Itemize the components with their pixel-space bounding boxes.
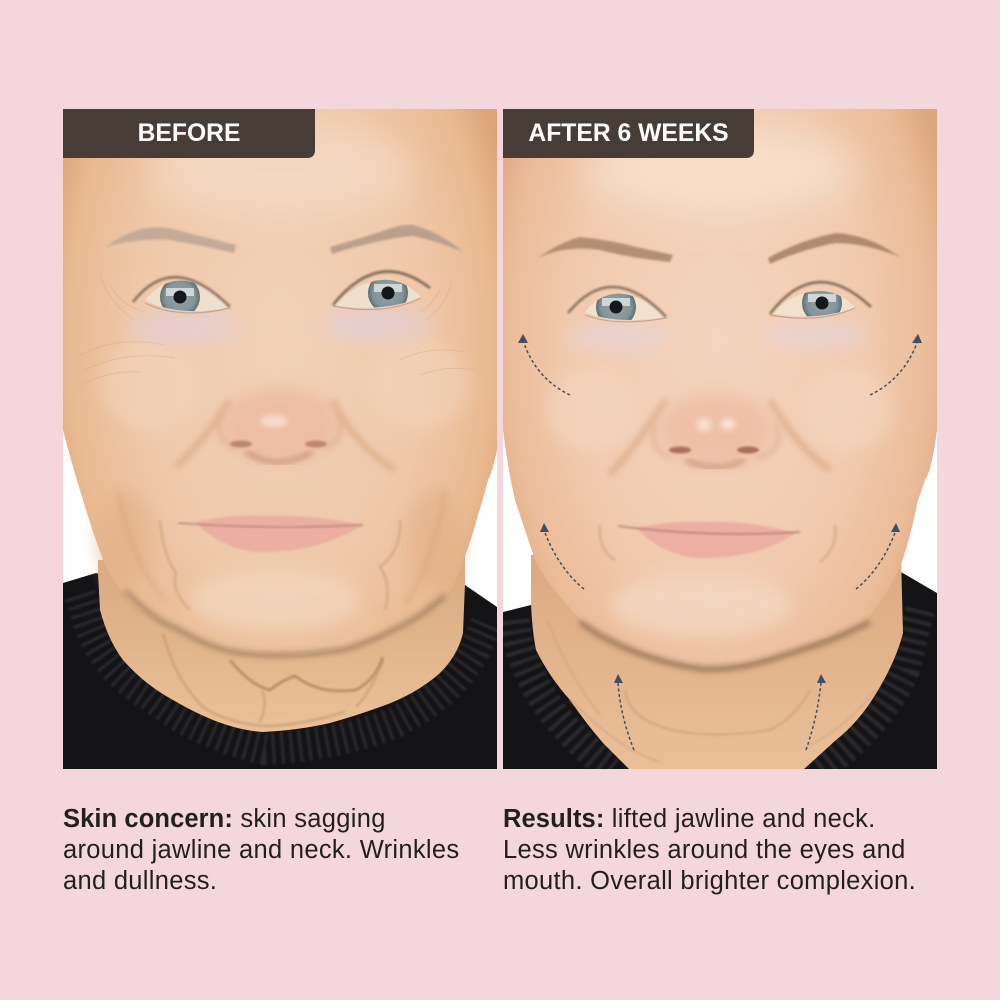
under-eye shadows <box>568 324 672 352</box>
cheek wrinkles <box>80 275 475 385</box>
after photo <box>503 109 937 770</box>
left eye <box>568 287 666 327</box>
face lights and shading <box>150 125 410 215</box>
nose <box>219 387 341 463</box>
cheek highlights <box>102 349 180 422</box>
black collar <box>63 573 497 769</box>
hair corner <box>910 109 937 150</box>
after label <box>503 109 754 158</box>
smile folds <box>610 400 830 475</box>
neck <box>531 555 903 770</box>
results text: Results: lifted jawline and neck. <box>503 805 876 833</box>
lips <box>178 516 363 552</box>
collar ruffle <box>515 610 920 769</box>
left eye <box>133 277 230 317</box>
neck folds <box>568 671 874 762</box>
infographic graphics <box>63 109 937 769</box>
results text: Less wrinkles around the eyes and <box>503 836 906 864</box>
nose <box>653 392 779 468</box>
black collar <box>503 572 937 769</box>
face <box>63 109 497 655</box>
lift arrows <box>518 334 922 750</box>
neck folds <box>163 633 383 726</box>
face lights and shading <box>585 125 855 215</box>
after label: AFTER 6 WEEKS <box>528 120 729 147</box>
right eye <box>333 272 430 313</box>
skin concern text <box>63 805 459 895</box>
lips <box>618 522 800 558</box>
results text: mouth. Overall brighter complexion. <box>503 867 916 895</box>
hair corner <box>484 109 497 124</box>
results text <box>503 805 916 895</box>
skin concern text: Skin concern: skin sagging <box>63 805 386 833</box>
nasolabial folds <box>176 400 395 470</box>
eyebrows <box>538 237 673 262</box>
skin concern text: and dullness. <box>63 867 217 895</box>
collar ruffle <box>80 595 488 749</box>
under-eye shadows <box>131 311 241 343</box>
before label: BEFORE <box>138 120 240 147</box>
skin concern text: around jawline and neck. Wrinkles <box>63 836 459 864</box>
before photo <box>63 109 497 769</box>
jaw shadow <box>580 622 870 669</box>
right eye <box>770 282 871 323</box>
before label <box>63 109 315 158</box>
eyebrows <box>106 227 236 253</box>
jaw shadow <box>125 590 445 655</box>
face <box>503 109 937 667</box>
neck <box>98 550 465 732</box>
